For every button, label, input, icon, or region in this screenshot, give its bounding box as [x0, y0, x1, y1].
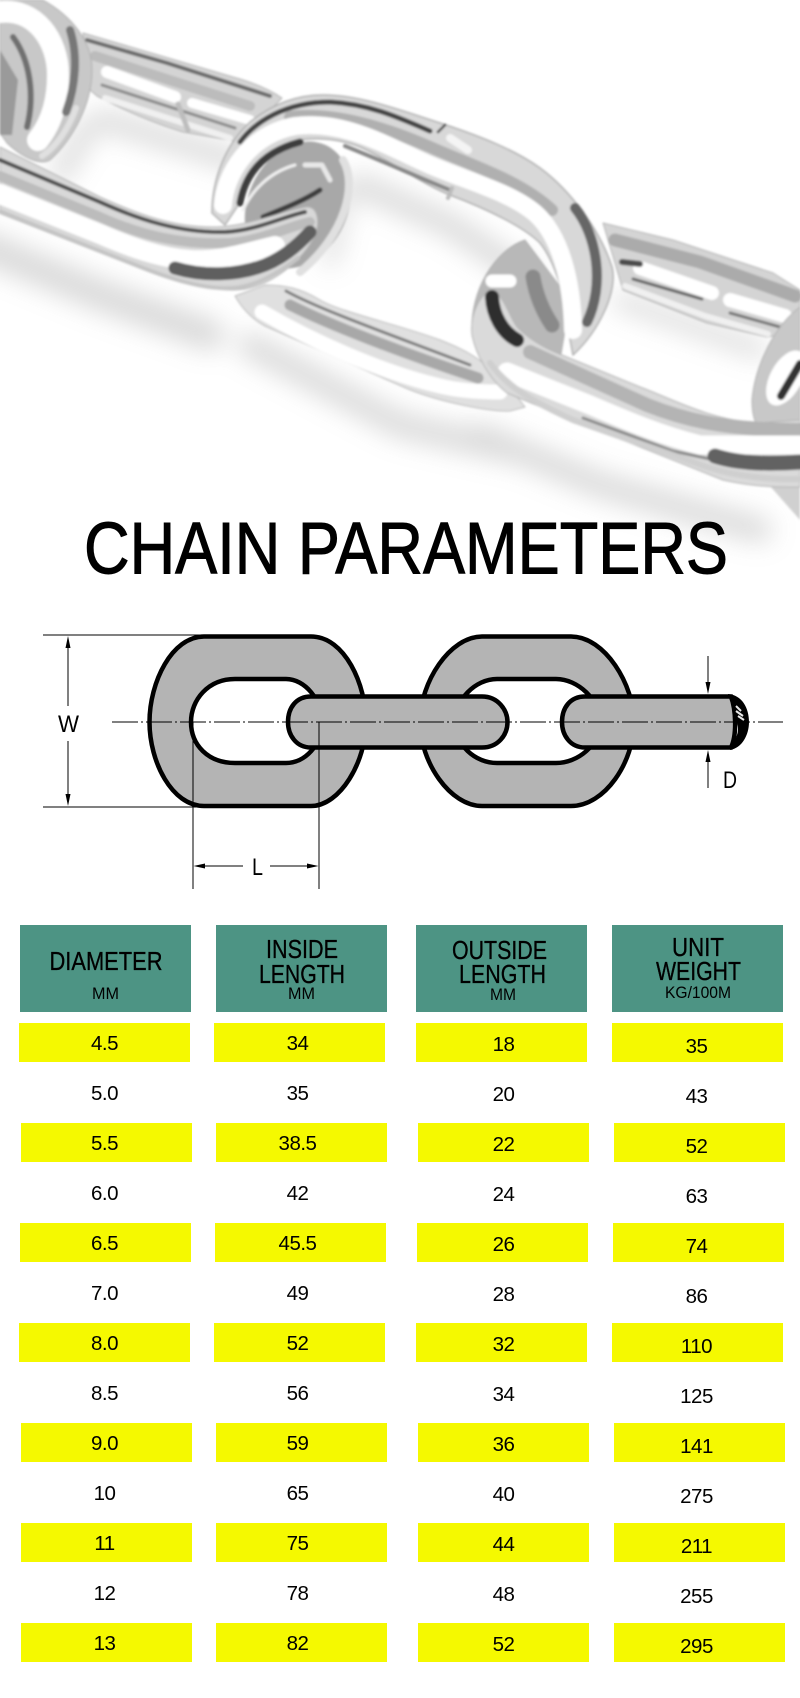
table header: diameter — [20, 925, 191, 1012]
table header: outside length — [416, 925, 587, 1012]
row 12: 12 — [94, 1582, 115, 1605]
cut end section — [728, 694, 749, 750]
table header: outside length: MM — [490, 985, 516, 1004]
row 6.5: 6.5 — [91, 1232, 118, 1255]
table header: unit weight: WEIGHT — [656, 958, 741, 986]
dimension L: L — [252, 854, 263, 881]
dimension L — [193, 722, 319, 889]
left oval link — [150, 636, 366, 806]
row 6.0: 6.0 — [91, 1182, 118, 1205]
row 5.5: 5.5 — [91, 1132, 118, 1155]
row 5.5 — [21, 1123, 785, 1162]
table header: unit weight — [612, 925, 783, 1012]
weld mark — [438, 125, 468, 198]
table header: diameter: MM — [92, 984, 119, 1003]
table header: inside length: LENGTH — [259, 961, 345, 989]
chain shadow — [0, 120, 760, 530]
front link: lower left run with hook — [0, 147, 318, 290]
back link: right upper run — [603, 223, 800, 337]
row 13: 52 — [493, 1633, 514, 1656]
row 4.5: 35 — [686, 1035, 707, 1058]
dimension W — [43, 635, 204, 807]
row 11: 11 — [94, 1532, 115, 1555]
table header: inside length: INSIDE — [266, 936, 338, 964]
lower chain link run — [235, 285, 525, 411]
row 7.0: 86 — [686, 1285, 707, 1308]
row 11 — [21, 1523, 785, 1562]
table header: inside length — [216, 925, 387, 1012]
row 6.5: 74 — [686, 1235, 707, 1258]
center horizontal link — [288, 696, 508, 748]
right horizontal link — [562, 696, 735, 748]
row 10 — [94, 1482, 713, 1508]
row 6.0: 63 — [686, 1185, 707, 1208]
chain dimension diagram — [43, 635, 783, 889]
row 6.5 — [20, 1223, 784, 1262]
row 6.0: 24 — [493, 1183, 514, 1206]
table header: outside length: LENGTH — [459, 961, 546, 989]
row 9.0 — [21, 1423, 785, 1462]
table header: outside length: OUTSIDE — [452, 937, 547, 965]
row 8.0: 32 — [493, 1333, 514, 1356]
row 8.5: 125 — [680, 1385, 713, 1408]
upper left link end — [0, 0, 92, 162]
row 9.0: 59 — [287, 1432, 308, 1455]
row 4.5 — [19, 1023, 783, 1062]
row 9.0: 141 — [680, 1435, 713, 1458]
center line — [112, 721, 783, 723]
dimension W: W — [58, 711, 79, 738]
row 4.5: 34 — [287, 1032, 308, 1055]
row 5.5: 22 — [493, 1133, 514, 1156]
inner core at hook — [244, 140, 349, 270]
row 5.5: 52 — [686, 1135, 707, 1158]
bottom right link tail — [770, 484, 800, 520]
row 11: 211 — [681, 1535, 712, 1558]
row 5.5: 38.5 — [279, 1132, 317, 1155]
right oval link — [420, 636, 634, 806]
row 8.5 — [91, 1382, 713, 1408]
row 4.5: 4.5 — [91, 1032, 118, 1055]
table header: diameter: DIAMETER — [50, 948, 162, 976]
row 11: 75 — [287, 1532, 308, 1555]
row 8.0 — [19, 1323, 783, 1362]
row 5.0: 20 — [493, 1083, 514, 1106]
row 7.0: 7.0 — [91, 1282, 118, 1305]
left end of the lower link, behind the center link — [472, 240, 570, 360]
dimension D — [706, 656, 737, 794]
row 13: 82 — [287, 1632, 308, 1655]
chain photo — [0, 0, 800, 530]
table header: unit weight: KG/100M — [665, 983, 731, 1002]
row 6.5: 26 — [493, 1233, 514, 1256]
row 10: 275 — [680, 1485, 713, 1508]
link body — [212, 95, 613, 355]
center chain link — [212, 95, 613, 355]
row 7.0: 49 — [287, 1282, 308, 1305]
row 13: 295 — [680, 1635, 713, 1658]
row 9.0: 36 — [493, 1433, 514, 1456]
row 5.0 — [91, 1082, 707, 1108]
row 8.0: 52 — [287, 1332, 308, 1355]
row 8.0: 8.0 — [91, 1332, 118, 1355]
row 11: 44 — [493, 1533, 514, 1556]
row 8.5: 56 — [287, 1382, 308, 1405]
row 8.5: 34 — [493, 1383, 514, 1406]
table header: unit weight: UNIT — [672, 934, 724, 962]
row 10: 65 — [287, 1482, 308, 1505]
row 5.0: 43 — [686, 1085, 707, 1108]
front link: lower right run — [472, 281, 800, 487]
table header: inside length: MM — [288, 984, 315, 1003]
row 7.0 — [91, 1282, 707, 1308]
right link end — [752, 307, 800, 425]
row 5.0: 35 — [287, 1082, 308, 1105]
row 8.5: 8.5 — [91, 1382, 118, 1405]
row 5.0: 5.0 — [91, 1082, 118, 1105]
row 12: 48 — [493, 1583, 514, 1606]
row 13 — [21, 1623, 785, 1662]
back link: upper left run — [83, 33, 282, 142]
row 6.0 — [91, 1182, 707, 1208]
row 4.5: 18 — [493, 1033, 514, 1056]
row 12: 78 — [287, 1582, 308, 1605]
row 13: 13 — [94, 1632, 115, 1655]
row 12 — [94, 1582, 713, 1608]
dimension D: D — [723, 767, 737, 794]
row 12: 255 — [680, 1585, 713, 1608]
row 7.0: 28 — [493, 1283, 514, 1306]
row 10: 10 — [94, 1482, 115, 1505]
row 10: 40 — [493, 1483, 514, 1506]
row 9.0: 9.0 — [91, 1432, 118, 1455]
row 6.5: 45.5 — [279, 1232, 317, 1255]
row 6.0: 42 — [287, 1182, 308, 1205]
row 8.0: 110 — [681, 1335, 712, 1358]
